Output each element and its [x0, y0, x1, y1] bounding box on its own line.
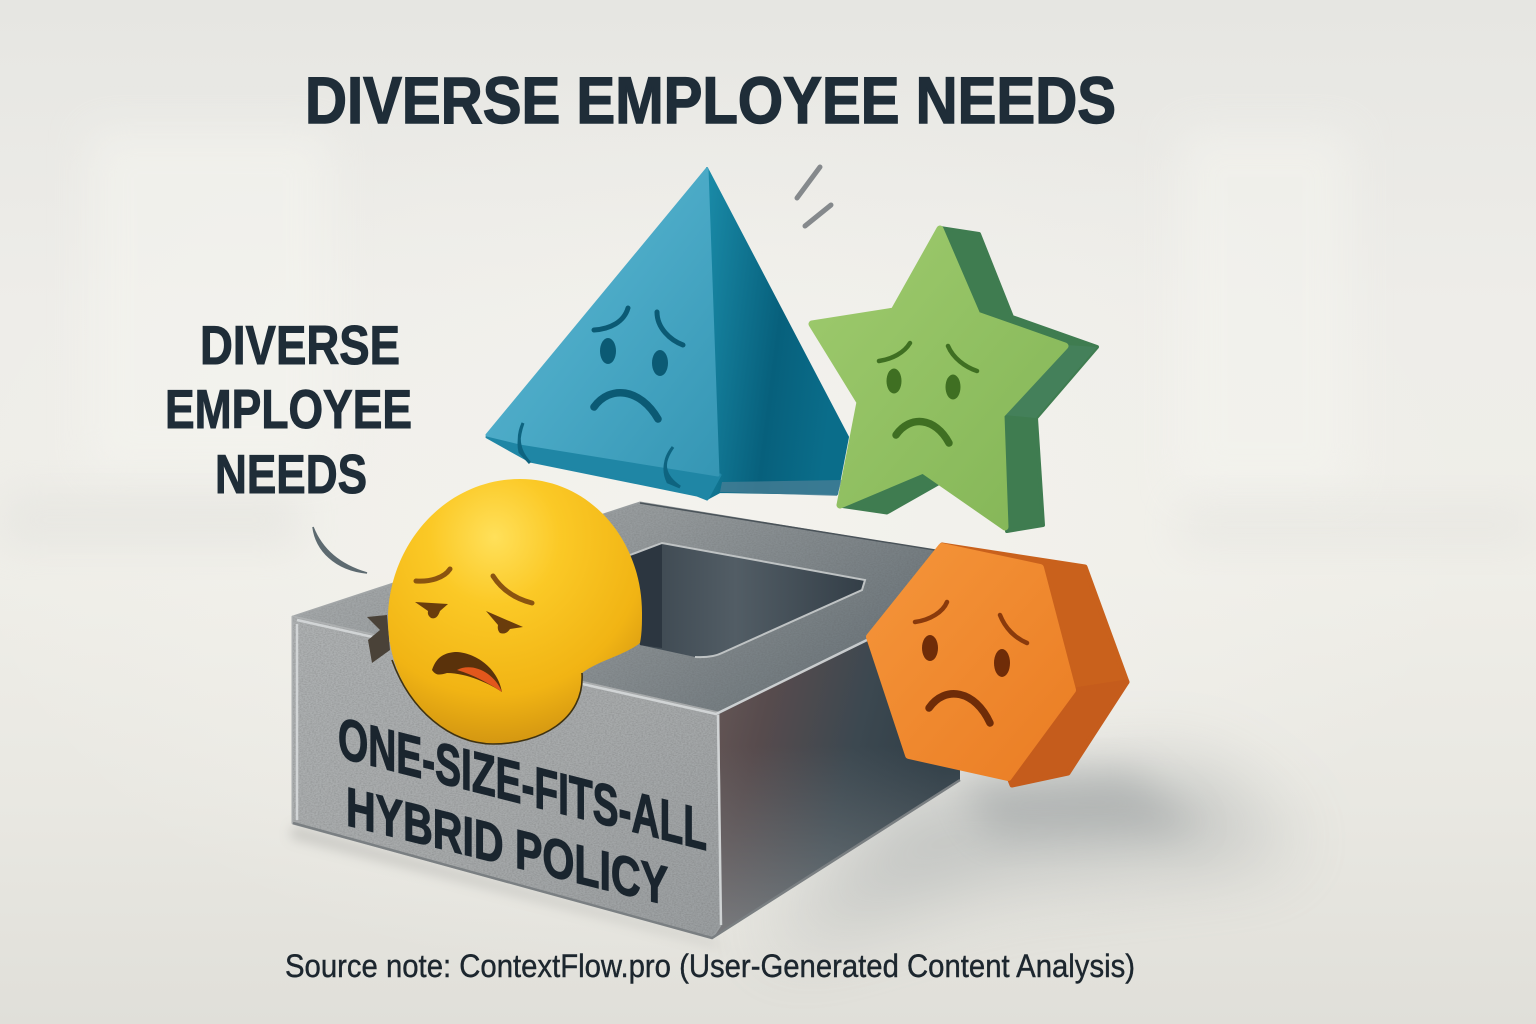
floor shadows [290, 770, 1300, 950]
title: DIVERSE EMPLOYEE NEEDS [305, 63, 1116, 137]
star eyes [886, 368, 960, 400]
ball right eye [486, 611, 523, 634]
pyramid mouth [594, 393, 658, 419]
star mouth [896, 422, 949, 443]
pyramid eyes [600, 338, 668, 376]
hexagon side lower [1010, 682, 1127, 785]
icon: crack in box [367, 615, 390, 663]
side label: diverse employee needs: NEEDS [215, 443, 367, 505]
box highlight edges [297, 620, 867, 925]
star brows [879, 343, 977, 371]
side label: diverse employee needs [165, 314, 412, 505]
metal grain [293, 617, 723, 939]
icon: sad orange hexagon [870, 545, 1127, 785]
star front [812, 229, 1065, 527]
ball tongue [457, 667, 502, 692]
hexagon side upper [942, 545, 1127, 690]
box top face [293, 503, 960, 713]
pyramid underside [487, 437, 720, 499]
ball mouth [432, 652, 502, 692]
icon: sad yellow ball [388, 479, 642, 744]
box front face [293, 617, 720, 937]
pyramid front face [487, 169, 718, 475]
hexagon front [870, 547, 1072, 777]
pyramid brows [594, 308, 683, 345]
pyramid right face [707, 168, 848, 499]
hexagon mouth [929, 694, 990, 723]
hexagon brows [915, 602, 1027, 643]
box right face [712, 590, 960, 937]
box label: HYBRID POLICY [346, 775, 668, 917]
box label: ONE-SIZE-FITS-ALL [338, 706, 707, 863]
top face grain [293, 503, 963, 715]
ball left brow [416, 569, 450, 581]
metal box [293, 503, 963, 939]
side label: diverse employee needs: DIVERSE [200, 314, 400, 376]
icon: sad blue pyramid [487, 168, 848, 499]
ball right brow [493, 576, 532, 603]
side label: diverse employee needs: EMPLOYEE [165, 378, 412, 440]
icon: motion curve near ball [313, 527, 367, 573]
ball contact shadow [392, 660, 582, 744]
source note: Source note: ContextFlow.pro (User-Generated Content Analysis) [285, 948, 1135, 984]
icon: sad green star [812, 228, 1097, 531]
icon: motion dashes [797, 167, 831, 226]
ball left eye [415, 602, 448, 618]
star side [940, 228, 1097, 531]
pyramid notches [519, 423, 680, 487]
box opening [630, 543, 865, 657]
hexagon eyes [922, 635, 1010, 677]
box label [338, 706, 707, 917]
